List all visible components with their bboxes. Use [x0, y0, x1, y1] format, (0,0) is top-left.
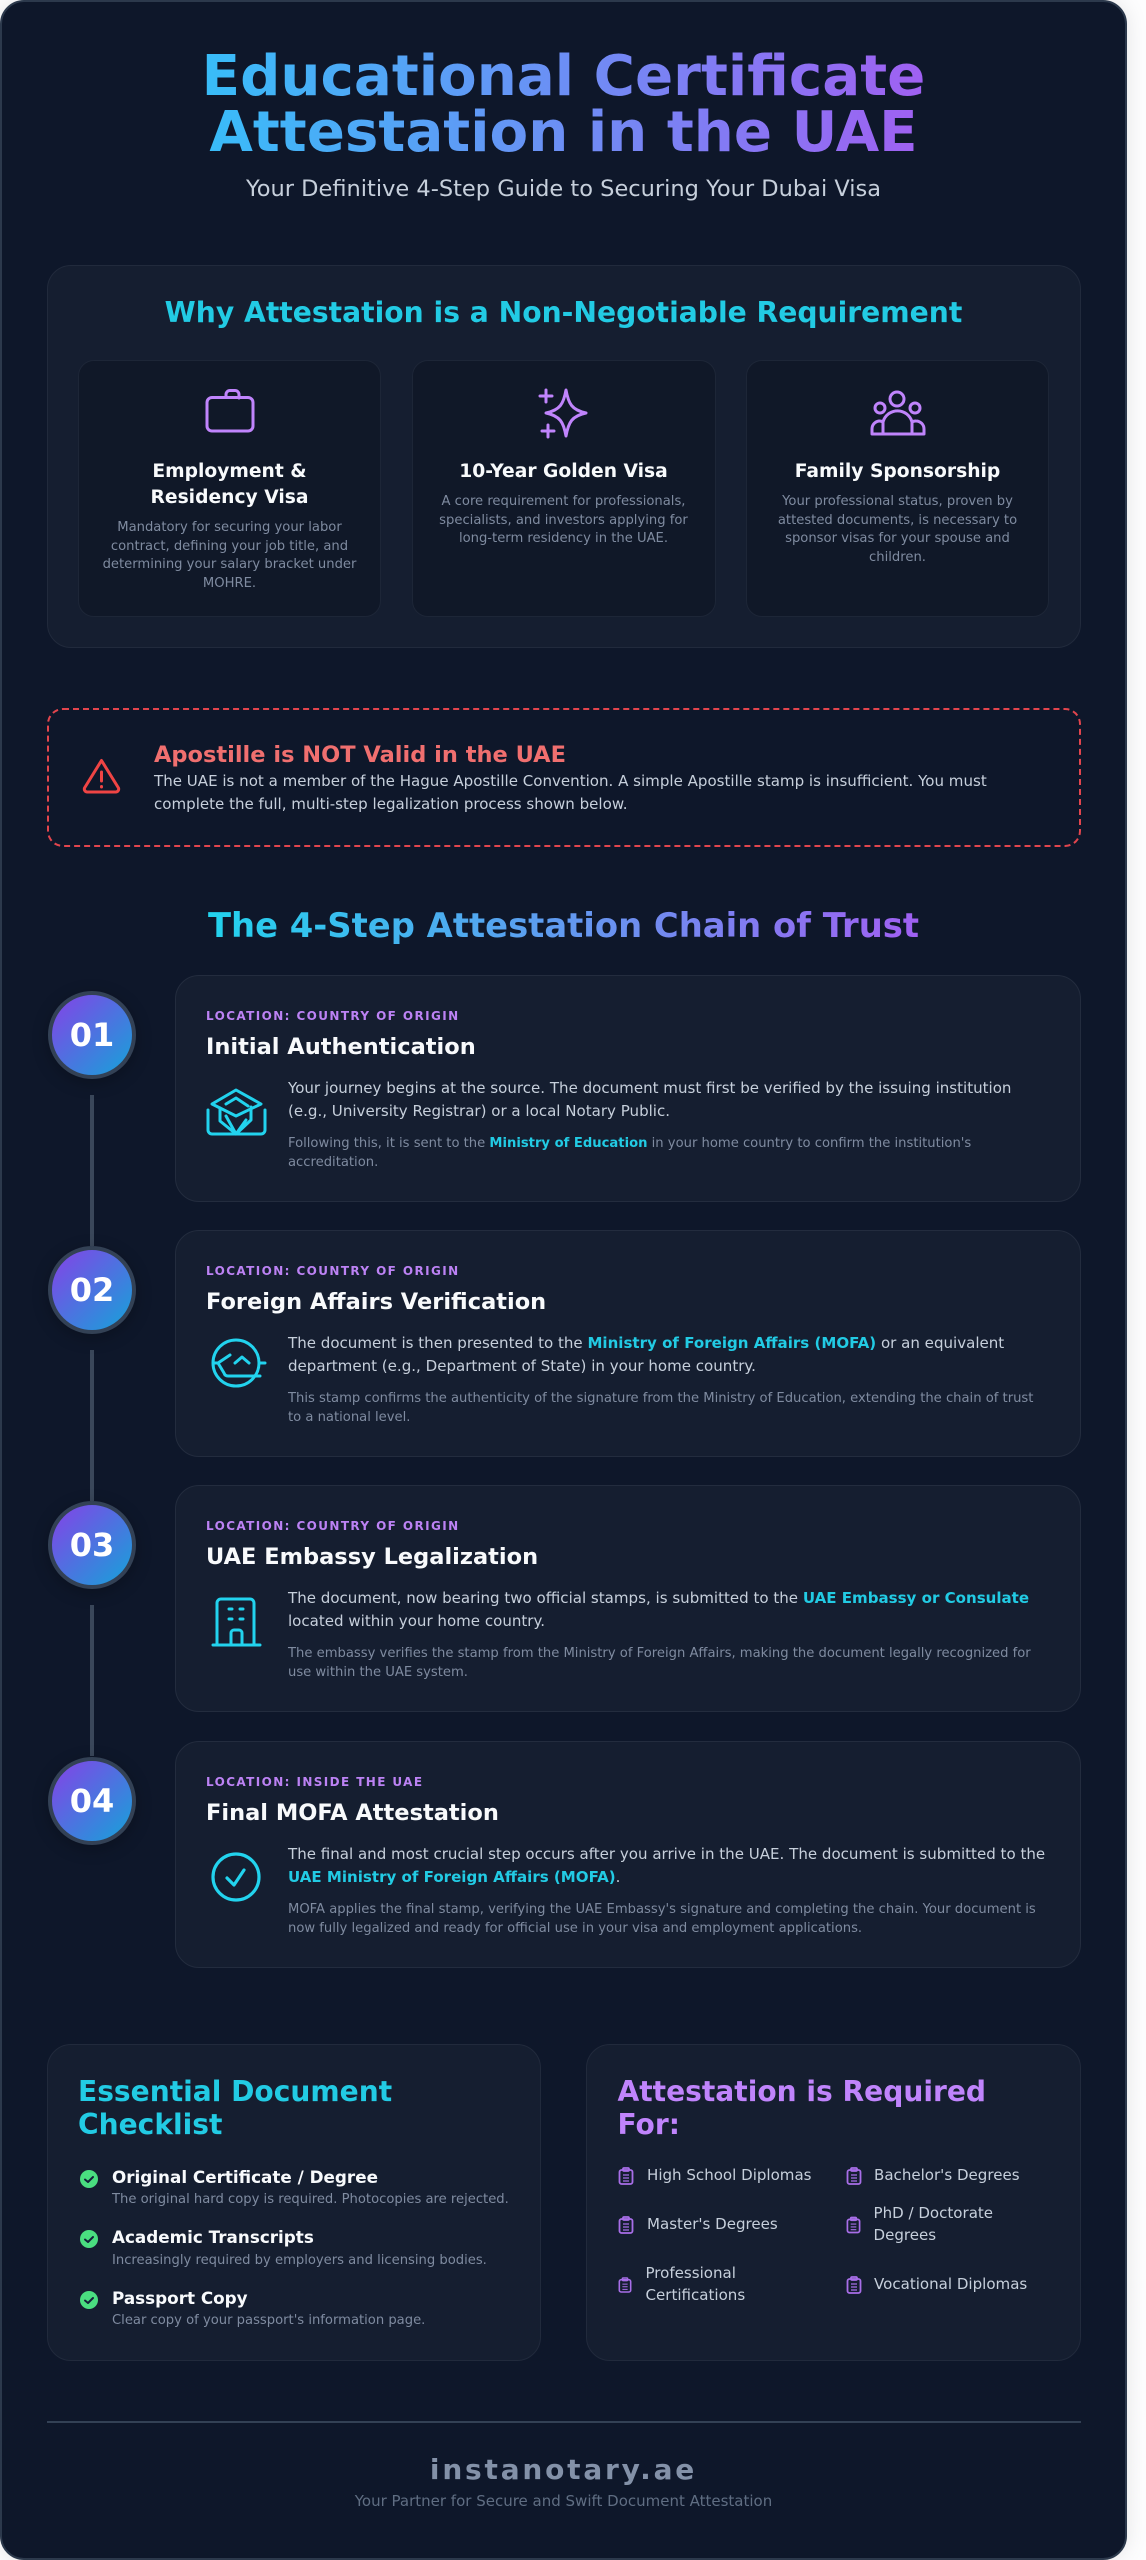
list item: professional: Professional	[646, 2264, 736, 2282]
step 1 text: Your journey begins at the source. The document must first be verified by the issuing institution	[288, 1079, 1011, 1097]
step 1 location: LOCATION: COUNTRY OF ORIGIN	[206, 1008, 460, 1022]
panel: required for	[586, 2044, 1081, 2361]
step 4 note: now fully legalized and ready for official use in your visa and employment applications.	[288, 1920, 862, 1936]
step 3 text	[288, 1589, 1029, 1630]
checklist item 3 note: Clear copy of your passport's information page.	[112, 2312, 425, 2328]
card: family sponsorship	[746, 360, 1049, 617]
connector 2	[90, 1350, 94, 1501]
step 3 note: The embassy verifies the stamp from the Ministry of Foreign Affairs, making the document legally recognized for	[288, 1646, 1031, 1660]
step 1 title: Initial Authentication	[206, 1034, 476, 1060]
step 2 note: This stamp confirms the authenticity of the signature from the Ministry of Education, extending the chain of trust	[288, 1390, 1033, 1406]
callout title: Apostille is NOT Valid in the UAE	[154, 742, 566, 768]
step 4 note	[288, 1902, 1036, 1936]
title: Educational Certificate	[202, 44, 925, 109]
callout text: The UAE is not a member of the Hague Apostille Convention. A simple Apostille stamp is insufficient. You must	[154, 772, 987, 790]
panel: why attestation	[47, 265, 1081, 648]
footer brand: instanotary.ae	[430, 2453, 697, 2486]
step 4 text: UAE Ministry of Foreign Affairs (MOFA).	[288, 1868, 620, 1886]
connector 3	[90, 1605, 94, 1756]
step 2 text: department (e.g., Department of State) in your home country.	[288, 1357, 756, 1375]
icon: check 3	[80, 2291, 98, 2309]
step 4 text	[288, 1845, 1045, 1886]
footer tagline: Your Partner for Secure and Swift Document Attestation	[355, 2492, 772, 2510]
step 3 number: 03	[70, 1526, 114, 1564]
step 3 number	[48, 1501, 136, 1589]
step 1 number	[48, 991, 136, 1079]
step 1 text: (e.g., University Registrar) or a local Notary Public.	[288, 1102, 670, 1120]
list item: professional	[646, 2264, 745, 2304]
card title: golden visa: 10-Year Golden Visa	[459, 461, 668, 482]
step 3 card	[174, 1485, 1081, 1712]
step 3 title: UAE Embassy Legalization	[206, 1544, 538, 1570]
step 3 text: The document, now bearing two official stamps, is submitted to the UAE Embassy or Consulate	[288, 1589, 1029, 1607]
icon: briefcase	[206, 389, 254, 432]
checklist heading	[78, 2074, 392, 2141]
checklist item 1 title: Original Certificate / Degree	[112, 2167, 378, 2187]
checklist item 2 title: Academic Transcripts	[112, 2227, 314, 2247]
icon: family group	[870, 390, 926, 436]
list item: master: Master's Degrees	[647, 2214, 778, 2232]
card text: family: sponsor visas for your spouse and	[785, 531, 1010, 546]
icon: check 1	[80, 2170, 98, 2188]
step 4 number	[48, 1756, 136, 1844]
card text: employment	[103, 520, 356, 591]
title	[202, 44, 925, 165]
step 1 card	[174, 975, 1081, 1202]
icon: check circle	[211, 1852, 261, 1902]
card text: family: Your professional status, proven by	[782, 494, 1013, 509]
step 4 text: The final and most crucial step occurs after you arrive in the UAE. The document is submitted to the	[288, 1845, 1045, 1863]
step 1 note	[288, 1136, 971, 1170]
card text: family	[778, 494, 1017, 565]
checklist heading: Essential Document	[78, 2074, 392, 2108]
icon: clipboard 4	[846, 2216, 860, 2234]
callout text: complete the full, multi-step legalization process shown below.	[154, 795, 628, 813]
step 2 number	[48, 1246, 136, 1334]
list item: high school: High School Diplomas	[647, 2166, 812, 2184]
card text: golden visa: A core requirement for professionals,	[442, 494, 685, 509]
step 4 number: 04	[70, 1782, 114, 1820]
connector 1	[90, 1095, 94, 1246]
icon: globe	[212, 1338, 266, 1388]
callout: apostille warning	[47, 708, 1081, 847]
panel: checklist	[47, 2044, 541, 2361]
step 4 title: Final MOFA Attestation	[206, 1800, 499, 1826]
card text: golden visa	[439, 494, 688, 546]
list item: phd: PhD / Doctorate	[874, 2204, 993, 2222]
list item: bachelor: Bachelor's Degrees	[874, 2166, 1020, 2184]
list item: phd: Degrees	[874, 2226, 936, 2244]
step 3 text: located within your home country.	[288, 1612, 545, 1630]
icon: sparkles	[538, 388, 588, 438]
step 4 location: LOCATION: INSIDE THE UAE	[206, 1774, 423, 1788]
list item: phd	[874, 2204, 993, 2244]
title: Attestation in the UAE	[209, 100, 918, 165]
checklist item 1 note: The original hard copy is required. Photocopies are rejected.	[112, 2192, 509, 2207]
card text: golden visa: long-term residency in the UAE.	[459, 531, 668, 546]
icon: clipboard 3	[618, 2216, 634, 2234]
card: employment visa	[78, 360, 381, 617]
step 1 note: Following this, it is sent to the Ministry of Education in your home country to confirm the institution's	[288, 1136, 971, 1150]
checklist item 2 note: Increasingly required by employers and licensing bodies.	[112, 2252, 487, 2268]
card title: employment: Residency Visa	[150, 487, 308, 508]
card: golden visa	[412, 360, 716, 617]
subtitle: Your Definitive 4-Step Guide to Securing Your Dubai Visa	[246, 176, 881, 202]
step 1 number: 01	[70, 1016, 114, 1054]
required for heading: Attestation is Required	[618, 2074, 986, 2108]
icon: clipboard 2	[846, 2167, 862, 2185]
step 4 card	[174, 1741, 1081, 1968]
card text: employment: contract, defining your job title, and	[111, 539, 348, 554]
step 2 card	[174, 1230, 1081, 1457]
step 2 note: to a national level.	[288, 1410, 410, 1424]
step 1 text	[288, 1079, 1011, 1120]
step 3 location: LOCATION: COUNTRY OF ORIGIN	[206, 1518, 460, 1532]
list item: vocational: Vocational Diplomas	[874, 2275, 1027, 2293]
step 2 number: 02	[70, 1271, 114, 1309]
icon: clipboard 5	[618, 2277, 632, 2293]
step 3 note	[288, 1646, 1031, 1680]
step 4 note: MOFA applies the final stamp, verifying the UAE Embassy's signature and completing the chain. Your document is	[288, 1902, 1036, 1916]
checklist heading: Checklist	[78, 2108, 222, 2141]
required for heading: For:	[618, 2108, 680, 2141]
required for heading	[618, 2074, 986, 2141]
icon: graduation cap	[206, 1088, 266, 1136]
heading: 4-step chain: The 4-Step Attestation Chain of Trust	[208, 906, 919, 944]
card text: employment: Mandatory for securing your labor	[117, 520, 342, 535]
card title: family: Family Sponsorship	[795, 461, 1000, 482]
callout text	[154, 772, 987, 813]
card text: family: attested documents, is necessary to	[778, 513, 1017, 528]
list item: professional: Certifications	[646, 2286, 745, 2304]
step 3 note: use within the UAE system.	[288, 1664, 468, 1680]
step 2 location: LOCATION: COUNTRY OF ORIGIN	[206, 1264, 460, 1278]
card text: golden visa: specialists, and investors applying for	[439, 513, 688, 528]
step 1 note: accreditation.	[288, 1154, 378, 1170]
icon: check 2	[80, 2230, 98, 2248]
card text: employment: MOHRE.	[203, 576, 256, 591]
card title: employment	[150, 461, 308, 508]
checklist item 3 title: Passport Copy	[112, 2288, 248, 2308]
icon: clipboard 1	[618, 2167, 634, 2185]
icon: warning triangle	[82, 758, 120, 794]
icon: clipboard 6	[846, 2276, 862, 2294]
card text: employment: determining your salary bracket under	[103, 557, 356, 572]
step 2 text: The document is then presented to the Ministry of Foreign Affairs (MOFA) or an equivalent	[288, 1334, 1004, 1352]
step 2 note	[288, 1390, 1034, 1424]
step 2 text	[288, 1334, 1004, 1375]
icon: building	[212, 1598, 262, 1646]
step 2 title: Foreign Affairs Verification	[206, 1288, 546, 1314]
card title: employment: Employment &	[152, 461, 307, 482]
card text: family: children.	[869, 550, 926, 565]
heading: why attestation: Why Attestation is a Non-Negotiable Requirement	[165, 296, 962, 328]
